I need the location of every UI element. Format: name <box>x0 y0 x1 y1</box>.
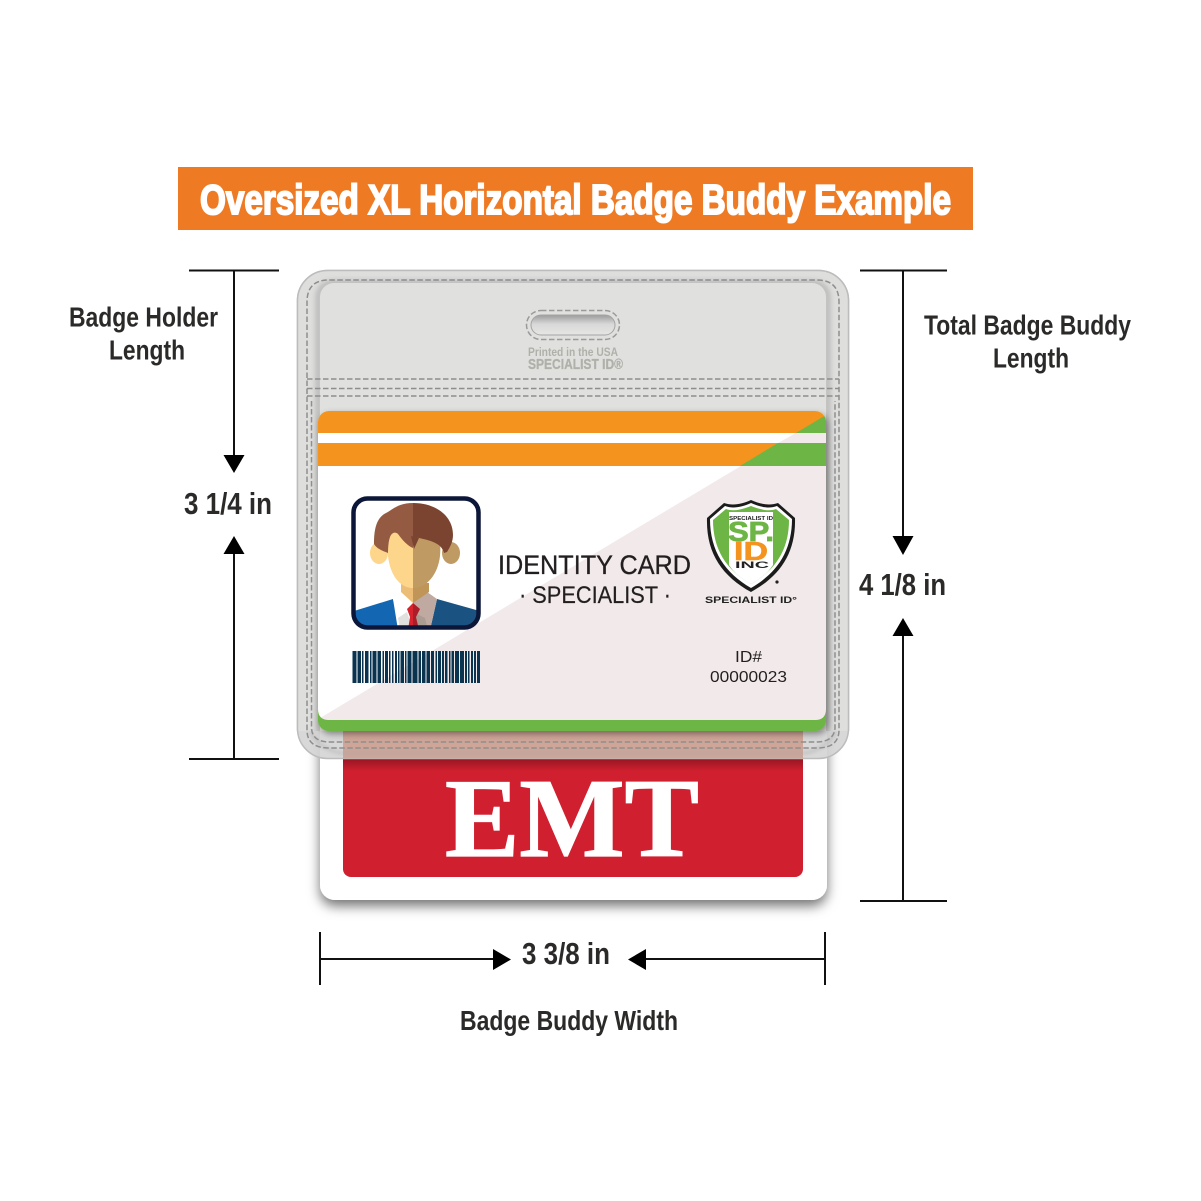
stitching <box>307 280 839 748</box>
id number: ID# <box>735 649 762 666</box>
badge buddy width dimension <box>320 932 825 1036</box>
holder imprint: SPECIALIST ID® <box>528 356 623 373</box>
label: badge holder length: Badge Holder <box>69 302 218 332</box>
bottom seam shading <box>310 731 836 753</box>
logo wordmark: SPECIALIST ID° <box>705 595 797 606</box>
ID letters: ID <box>734 536 768 566</box>
photo portrait <box>354 498 480 630</box>
neck <box>401 583 413 603</box>
SP letters: SP. <box>728 516 774 547</box>
frame <box>354 498 478 628</box>
slot hole <box>526 310 620 340</box>
badge buddy insert <box>320 700 827 900</box>
id number: 00000023 <box>710 669 787 686</box>
green base <box>318 708 826 731</box>
face <box>388 525 413 588</box>
label: length: Length <box>993 342 1069 374</box>
ears <box>370 542 388 564</box>
id number <box>710 649 787 686</box>
infographic canvas <box>70 167 1131 1036</box>
barcode <box>352 651 480 683</box>
holder imprint: Printed in the USA <box>528 347 618 359</box>
INC letters: INC <box>735 560 769 571</box>
value: 3 3/8 in: 3 3/8 in <box>522 936 610 971</box>
specialist id shield logo <box>705 500 797 606</box>
value: 3 1/4 in: 3 1/4 in <box>184 486 272 521</box>
red EMT panel <box>343 725 803 877</box>
title banner: Oversized XL Horizontal Badge Buddy Example <box>200 176 951 223</box>
holder imprint <box>528 347 623 373</box>
shield small text: SPECIALIST ID <box>729 516 773 522</box>
hair <box>374 503 413 553</box>
orange stripes <box>318 411 826 433</box>
EMT text: EMT <box>445 757 699 881</box>
badge holder length dimension <box>69 270 279 759</box>
identity card <box>318 411 826 731</box>
tie <box>407 603 413 626</box>
card subtitle: · SPECIALIST · <box>519 582 671 609</box>
shirt <box>393 599 399 626</box>
title banner <box>178 167 973 230</box>
value: 4 1/8 in: 4 1/8 in <box>859 567 946 602</box>
label: badge buddy width: Badge Buddy Width <box>460 1005 678 1036</box>
vinyl badge holder <box>298 270 848 758</box>
total badge buddy length dimension <box>859 270 1131 901</box>
card title: IDENTITY CARD <box>498 550 691 580</box>
jacket <box>356 599 398 626</box>
label: total badge buddy: Total Badge Buddy <box>924 310 1131 340</box>
label: length: Length <box>109 334 185 366</box>
